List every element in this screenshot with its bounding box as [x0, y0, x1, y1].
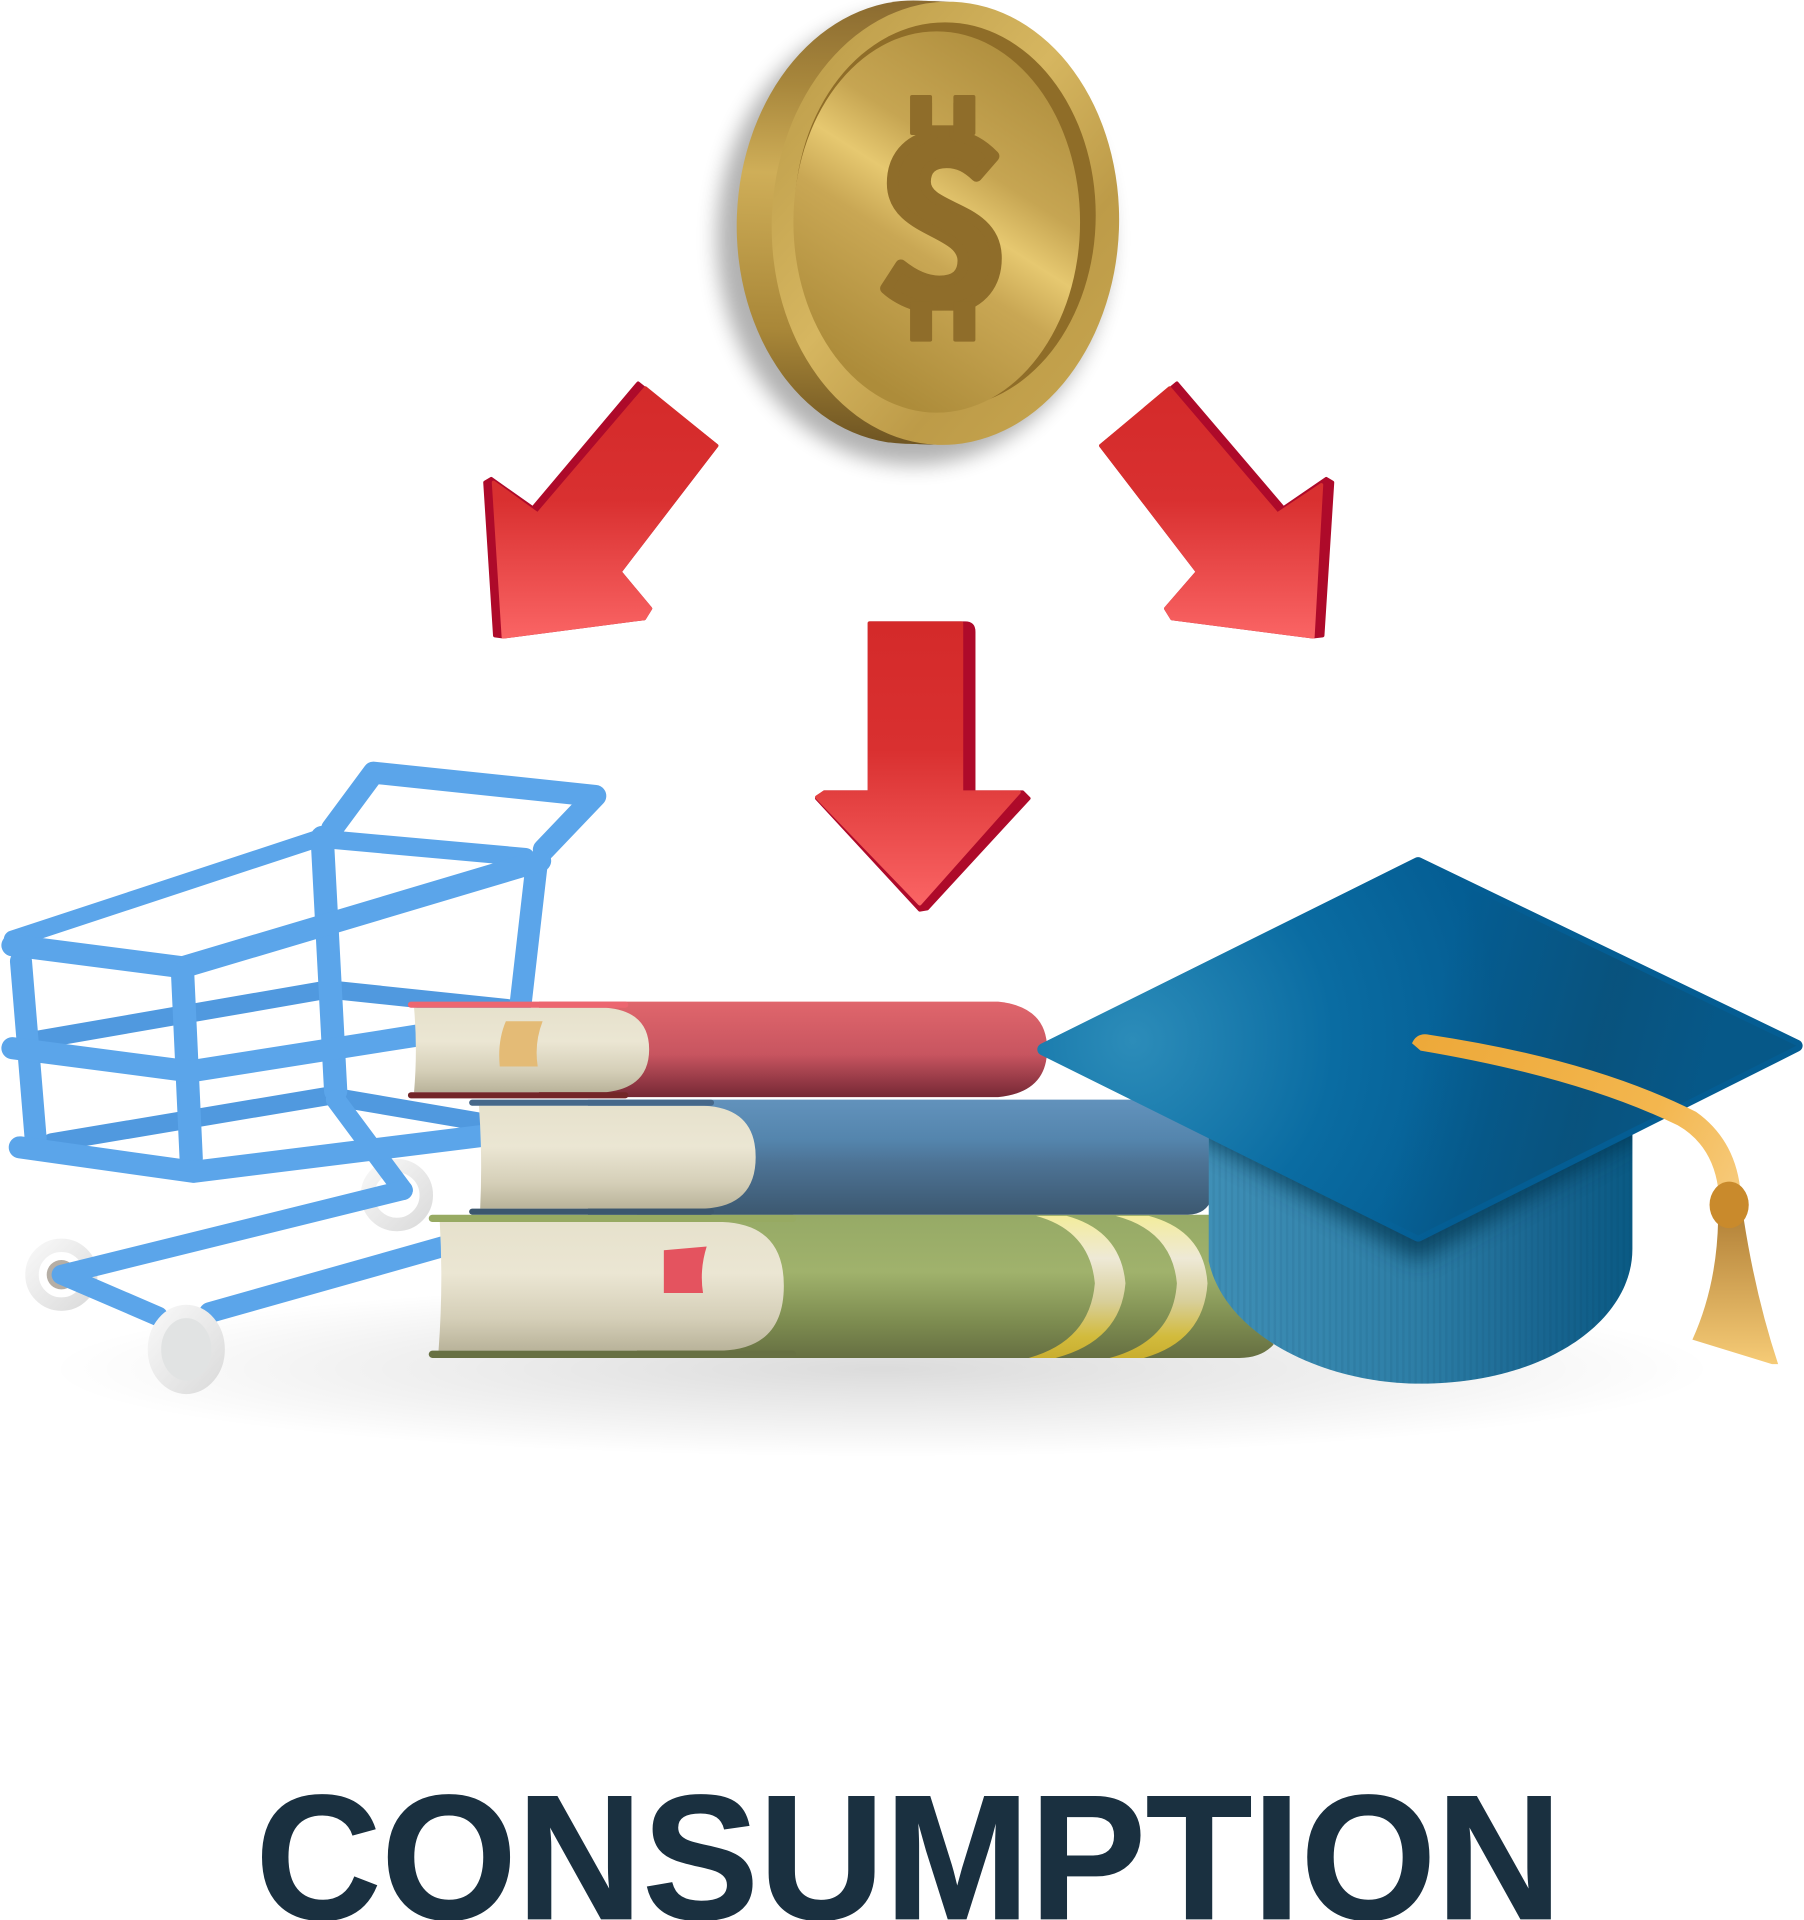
ground shadow	[49, 1281, 1714, 1457]
book: green	[429, 1215, 1274, 1358]
icon: gold dollar coin	[717, 0, 1127, 465]
arrow: center down	[817, 623, 1029, 910]
books stack	[408, 1002, 1274, 1358]
tassel	[1692, 1220, 1778, 1364]
tassel cord	[1412, 1034, 1740, 1188]
icon: graduation cap	[1041, 857, 1800, 1384]
icon: shopping cart	[12, 773, 595, 1387]
book: red	[408, 1002, 1047, 1098]
book: blue	[469, 1100, 1212, 1215]
dollar sign: $	[875, 36, 1012, 374]
arrow: left down	[485, 383, 716, 637]
wheels	[32, 1166, 426, 1304]
arrow: right down	[1101, 383, 1332, 637]
